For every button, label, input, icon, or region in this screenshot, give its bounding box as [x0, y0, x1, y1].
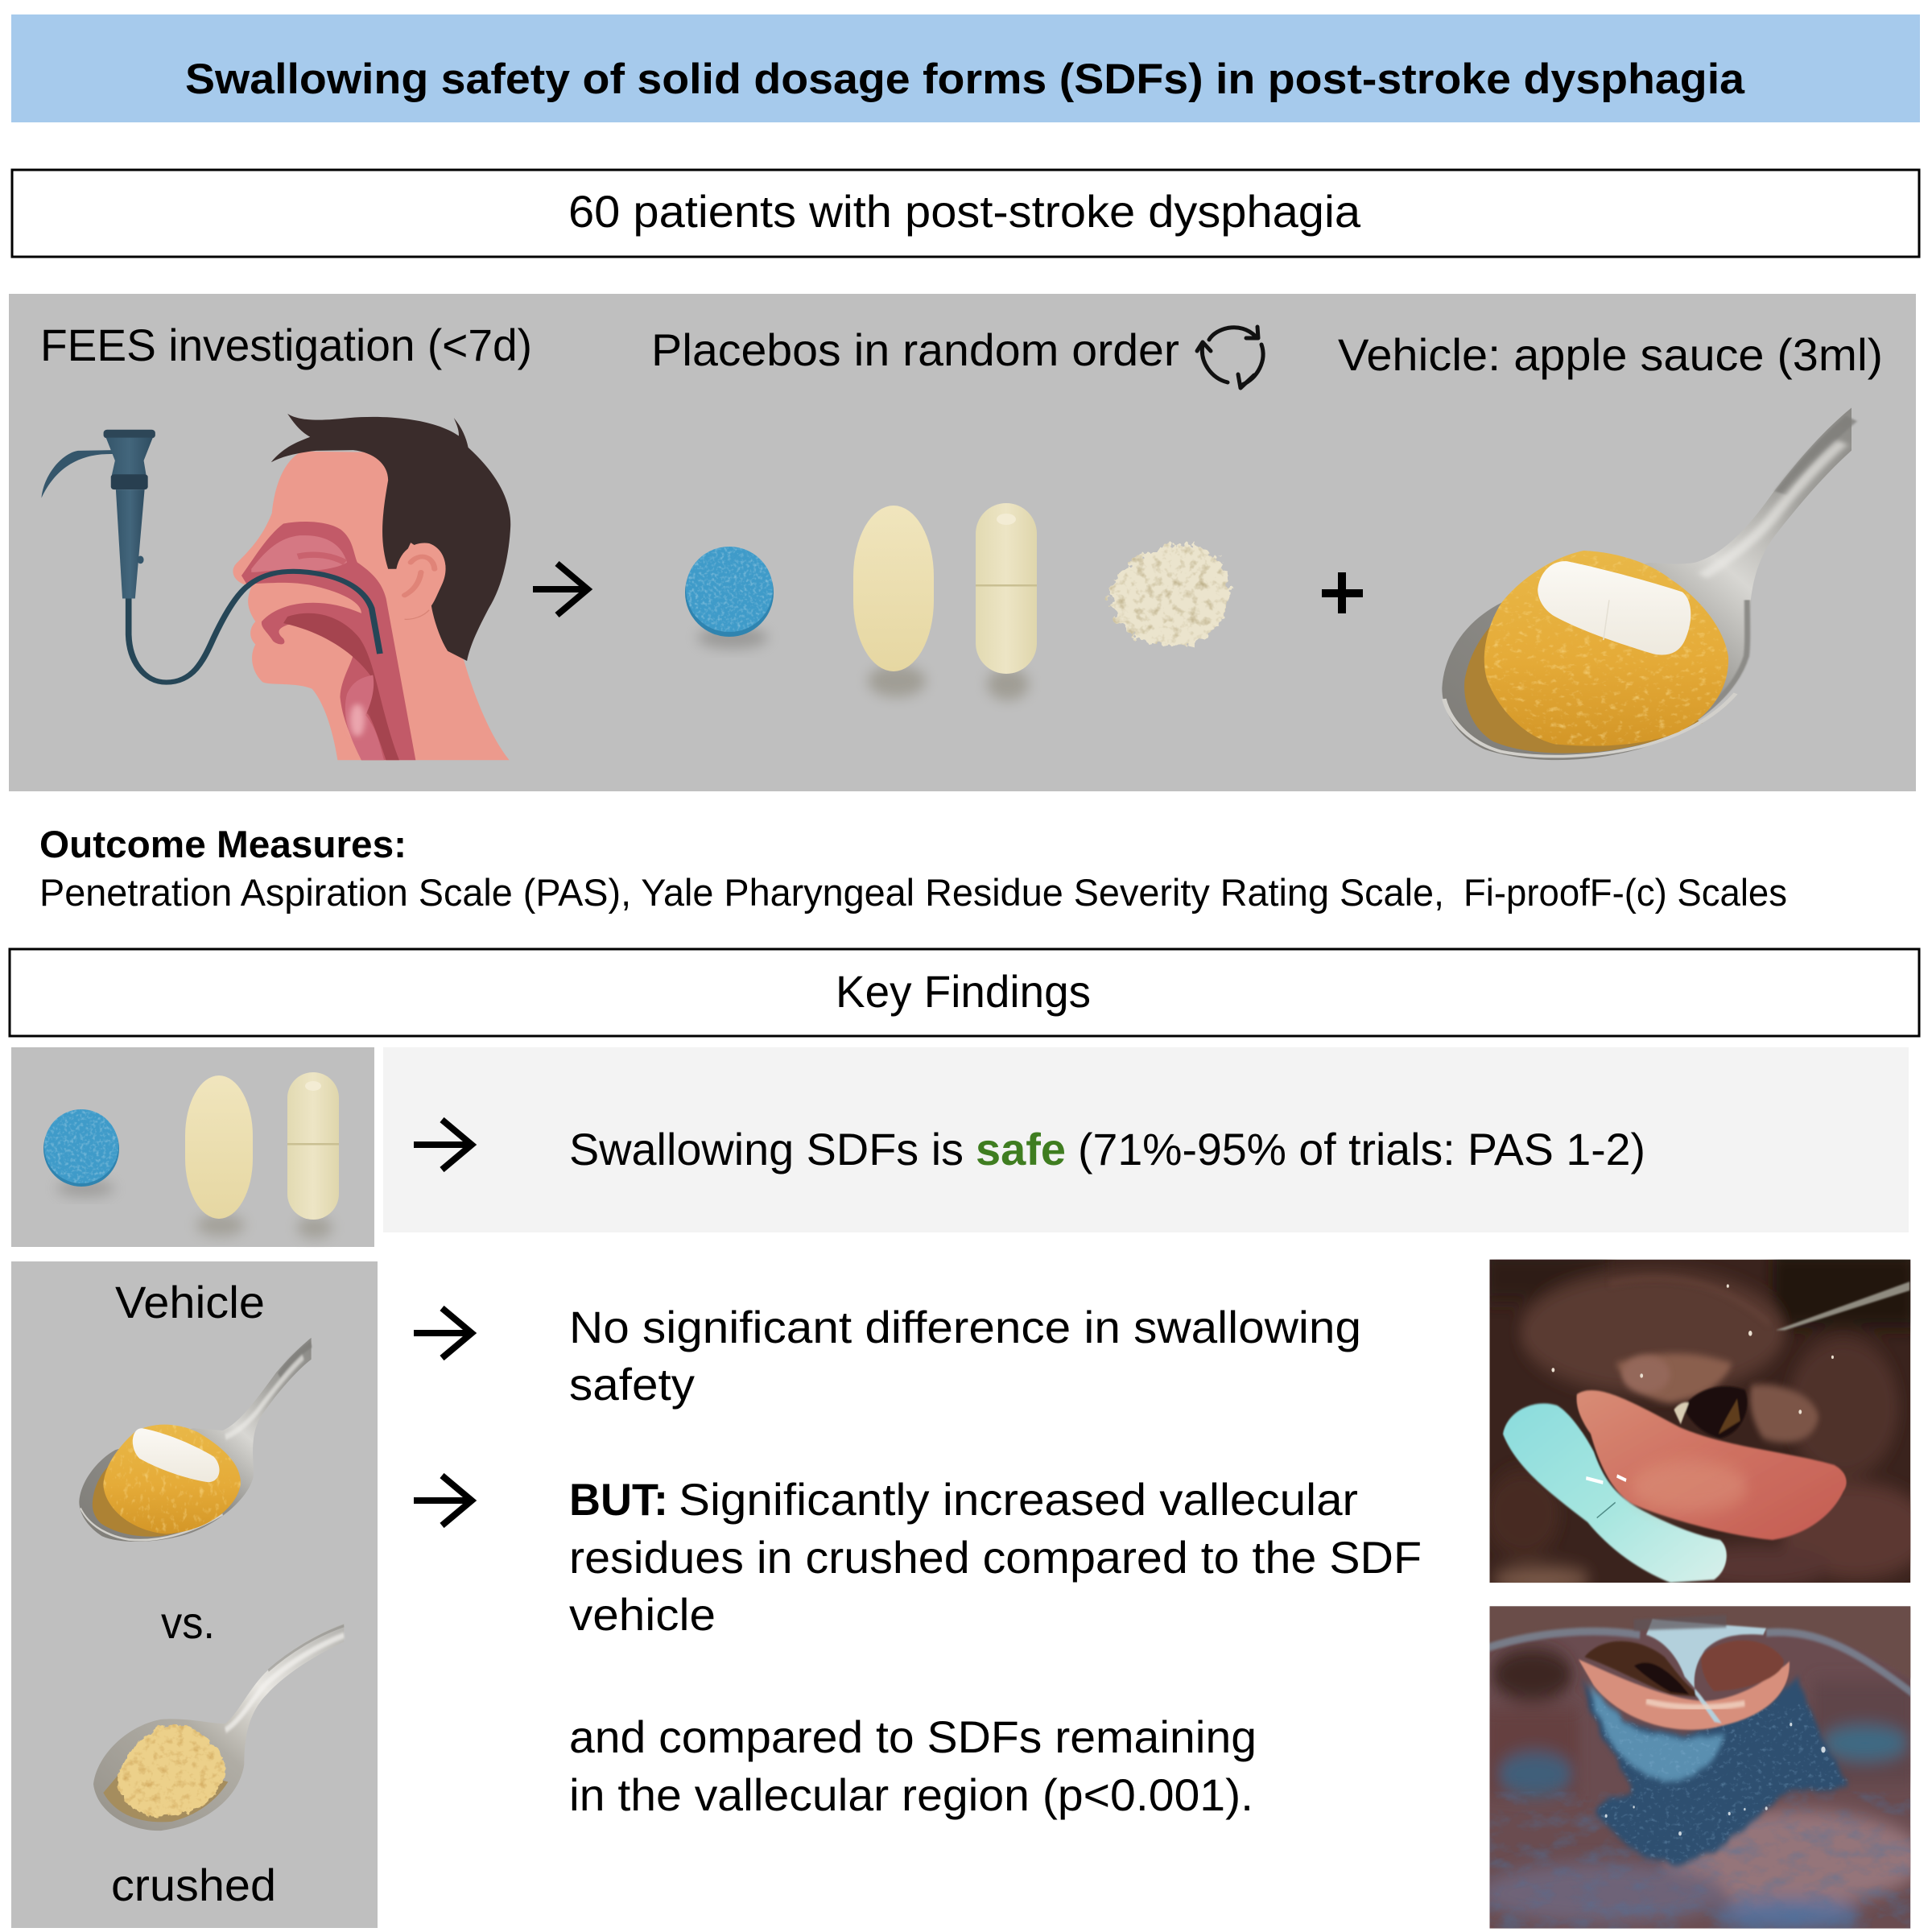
icon: random order cycle: [1197, 327, 1263, 388]
key findings box: [10, 949, 1919, 1036]
endoscopic photo: blue-stained residue in vallecula: [1480, 1606, 1923, 1931]
blue round tablet: [685, 547, 774, 649]
panel: study protocol: [9, 294, 1916, 791]
capsule: [976, 503, 1037, 700]
finding text: safe: [976, 1124, 1066, 1174]
label: vehicle: Vehicle: [115, 1277, 265, 1327]
oval tablet: [185, 1075, 253, 1236]
text: increased residues: residues in crushed compared to the SDF: [569, 1532, 1422, 1583]
panel: vehicle vs crushed: [11, 1261, 378, 1928]
spoon: crushed tablet in apple sauce: [93, 1624, 344, 1831]
apple sauce spoon with capsule: [1442, 408, 1852, 760]
text: compared to SDFs in vallecula: [569, 1711, 1257, 1820]
illustration: endoscope: [42, 430, 250, 683]
text: increased residues: BUT:: [569, 1474, 668, 1525]
panel: solid dosage forms: [11, 1047, 374, 1247]
outcome measures text: [39, 823, 1787, 914]
text: no significant difference: [569, 1302, 1361, 1410]
arrow: no difference: [414, 1308, 472, 1358]
key findings box: Key Findings: [836, 966, 1091, 1017]
arrow: but: [414, 1476, 472, 1525]
powder pile: [1109, 544, 1230, 647]
text: no significant difference: safety: [569, 1359, 695, 1410]
outcome measures text: Fi-proofF-(c) Scales: [1463, 871, 1787, 914]
text: increased residues: [569, 1474, 1422, 1640]
heading: vehicle: Vehicle: apple sauce (3ml): [1338, 329, 1883, 380]
label: crushed: crushed: [111, 1860, 276, 1910]
text: compared to SDFs in vallecula: and compared to SDFs remaining: [569, 1711, 1257, 1762]
label: vs: vs.: [161, 1597, 215, 1648]
oval tablet: [853, 506, 934, 697]
heading: placebos: Placebos in random order: [651, 324, 1179, 375]
text: increased residues: Significantly increased vallecular: [679, 1474, 1358, 1525]
text: compared to SDFs in vallecula: in the vallecular region (p<0.001).: [569, 1769, 1253, 1820]
arrow: [414, 1120, 472, 1170]
blue tablet: [43, 1109, 119, 1197]
spoon: capsule in apple sauce: [79, 1338, 312, 1542]
title banner: [11, 14, 1920, 122]
title banner: Swallowing safety of solid dosage forms (SDFs) in post-stroke dysphagia: [185, 56, 1745, 103]
arrow: to placebos: [533, 564, 588, 615]
plus sign: [1322, 572, 1363, 613]
heading: FEES investigation: FEES investigation (<7d): [40, 320, 532, 370]
capsule: [287, 1072, 339, 1239]
endoscopic photo: capsule in vallecula: [1486, 1253, 1930, 1593]
finding text: (71%-95% of trials: PAS 1-2): [1078, 1124, 1645, 1174]
text: no significant difference: No significant difference in swallowing: [569, 1302, 1361, 1352]
finding text: [569, 1124, 1645, 1174]
population box: [12, 170, 1919, 257]
outcome measures text: Penetration Aspiration Scale (PAS), Yale Pharyngeal Residue Severity Rating Scale,: [39, 871, 1444, 914]
outcome measures text: Outcome Measures:: [39, 823, 407, 865]
panel: safety finding: [383, 1047, 1909, 1232]
illustration: head cross-section: [233, 414, 510, 760]
text: increased residues: vehicle: [569, 1589, 716, 1640]
population box: 60 patients with post-stroke dysphagia: [568, 186, 1361, 237]
finding text: Swallowing SDFs is: [569, 1124, 964, 1174]
